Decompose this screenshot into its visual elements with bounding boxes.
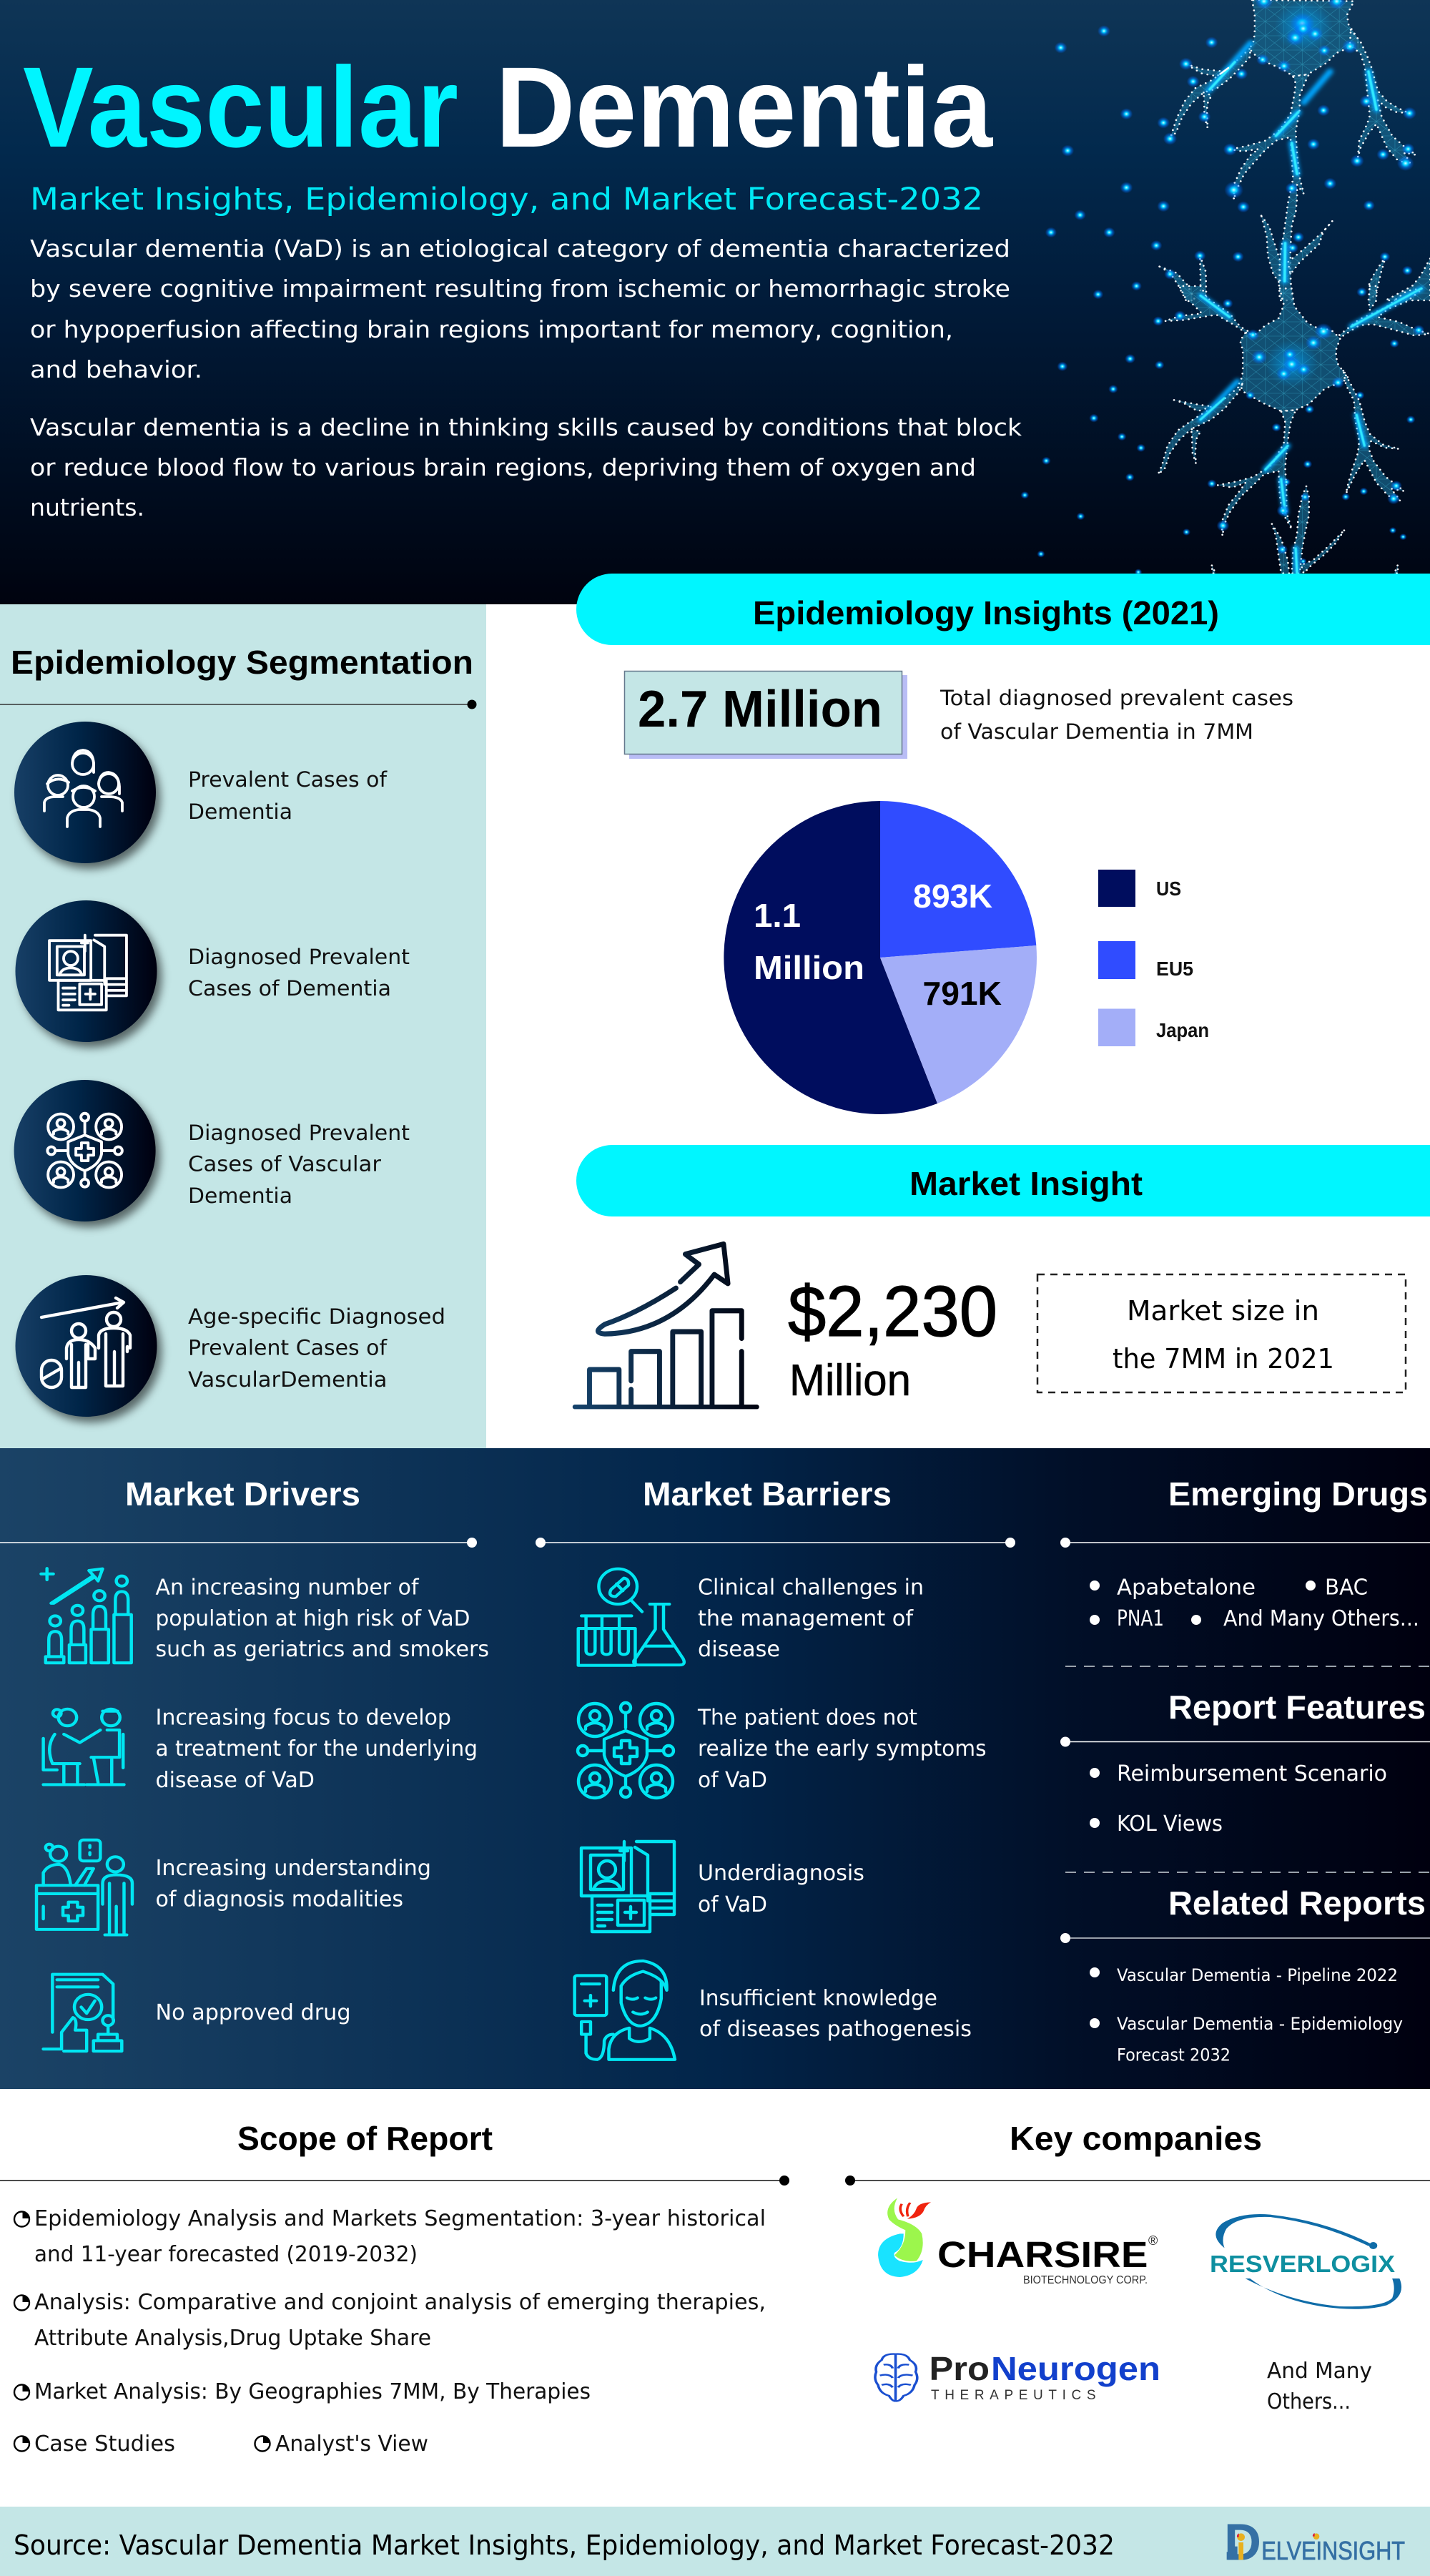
pie labels: 791K [922,975,1002,1012]
scope bullet icons [14,2211,270,2452]
market value [788,1272,997,1405]
icon: population growth [41,1568,132,1663]
source text: Source: Vascular Dementia Market Insights, Epidemiology, and Market Forecast-2032 [14,2530,1115,2561]
pie legend: EU5 [1156,958,1193,980]
intro paragraph 2: or reduce blood flow to various brain regions, depriving them of oxygen and [30,453,976,481]
text: barrier 4: of diseases pathogenesis [699,2017,972,2042]
emerging drugs: Emerging Drugs [1168,1475,1428,1513]
text: diagnosed vascular dementia: Cases of Vascular [188,1151,381,1176]
report features: Reimbursement Scenario [1117,1761,1387,1786]
emerging drugs: Apabetalone [1117,1575,1256,1601]
text: and many others: Others... [1267,2389,1351,2414]
logo: Charsire: BIOTECHNOLOGY CORP. [1023,2274,1148,2286]
title: Vascular [23,43,458,171]
logo: Resverlogix: RESVERLOGIX [1210,2251,1395,2277]
logo: DelveInsight: ELVEINSIGHT [1261,2536,1405,2565]
footer background [0,2507,1430,2576]
related reports: Vascular Dementia - Pipeline 2022 [1117,1965,1398,1985]
slice: EU5 [880,801,1036,958]
text: barrier 1: disease [698,1637,780,1662]
text: barrier 4: Insufficient knowledge [699,1986,937,2011]
intro paragraph 1: and behavior. [30,355,202,383]
column: market drivers [0,1475,489,2051]
column: market barriers [536,1475,1015,2060]
pill heading: epidemiology insights [576,574,1430,645]
text: age-specific: Age-specific Diagnosed [188,1304,445,1329]
text: prevalent cases: Prevalent Cases of [188,767,388,792]
text: diagnosed vascular dementia [188,1121,410,1208]
icon: consultation [44,1709,124,1784]
icon: rising bar chart [575,1244,757,1407]
intro paragraph 2: Vascular dementia is a decline in thinking skills caused by conditions that block [30,413,1022,441]
text: driver 2: disease of VaD [156,1768,315,1793]
item: diagnosed dementia [16,900,410,1048]
text: barrier 1: the management of [698,1606,914,1631]
icon: medical document [49,935,127,1010]
icon: group of people [44,750,122,827]
title [23,43,993,171]
barrier 3 [581,1842,864,1932]
intro paragraph 2 [30,413,1022,521]
text: diagnosed dementia [188,945,410,1001]
icon: diagnosis desk [36,1840,132,1935]
logo: Charsire: ® [1148,2233,1158,2248]
intro paragraph 1: or hypoperfusion affecting brain regions important for memory, cognition, [30,315,953,343]
text: driver 3 [156,1856,431,1912]
pie labels: 893K [913,877,992,915]
band background [0,1448,1430,2089]
text: driver 1 [156,1575,489,1662]
text: driver 3: of diagnosis modalities [156,1887,403,1912]
pie legend: US [1156,877,1181,900]
related reports [1060,1884,1430,2065]
header panel [0,0,1430,604]
upper neuron [1045,0,1430,300]
driver 3 [36,1840,431,1935]
text: driver 1: such as geriatrics and smokers [156,1637,489,1662]
emerging drugs: PNA1 [1117,1606,1164,1631]
text: barrier 3 [698,1861,864,1917]
logo: Charsire: CHARSIRE [937,2234,1148,2275]
icon: shield network [578,1703,674,1798]
text: driver 2: Increasing focus to develop [156,1705,451,1730]
driver 2 [44,1705,478,1793]
text: prevalent cases: Dementia [188,800,292,824]
scope list text [34,2206,766,2457]
emerging drugs [1060,1475,1430,1631]
dashed callout: market size: Market size in [1127,1295,1319,1327]
text: driver 4: No approved drug [156,2000,350,2025]
text: diagnosed dementia: Diagnosed Prevalent [188,945,410,969]
related reports: Related Reports [1168,1884,1426,1922]
text: diagnosed vascular dementia: Diagnosed Prevalent [188,1121,410,1145]
pie legend: Japan [1156,1019,1209,1041]
text: driver 2: a treatment for the underlying [156,1736,478,1761]
report features: Report Features [1168,1688,1426,1726]
icon: approval document [44,1975,122,2051]
column: emerging drugs, report features, related reports [1060,1475,1430,2065]
lower neuron [1020,286,1429,576]
source footer [0,2507,1430,2576]
heading: market drivers: Market Drivers [125,1475,360,1513]
heading: market barriers: Market Barriers [643,1475,892,1513]
icon: shield network [47,1114,122,1187]
text: barrier 2: The patient does not [697,1705,917,1730]
text: barrier 3: Underdiagnosis [698,1861,864,1886]
logo: ProNeurogen: THERAPEUTICS [931,2388,1095,2403]
driver 1 [41,1568,489,1663]
related reports: Vascular Dementia - Epidemiology [1117,2014,1403,2034]
logo: ProNeurogen [875,2350,1160,2403]
dashed callout: market size [1037,1274,1406,1392]
market value: $2,230 [788,1272,997,1352]
icon: patient with IV drip [575,1961,675,2060]
white background of middle section [486,604,1430,1448]
panel: scope of report [0,2120,789,2457]
heading: scope of report: Scope of Report [237,2120,493,2157]
text: barrier 1 [698,1575,924,1662]
pie labels: 1.1 [754,897,801,934]
report features [1060,1688,1430,1837]
stat box: 2.7 million [625,671,907,759]
intro paragraph 1: Vascular dementia (VaD) is an etiological category of dementia characterized [30,235,1010,262]
logo: ProNeurogen: Pro [930,2350,990,2387]
panel: market insight [575,1145,1430,1407]
text: driver 1: An increasing number of [156,1575,420,1601]
market value: Million [789,1356,911,1405]
panel background [0,604,486,1448]
item: prevalent cases [14,722,388,869]
text: barrier 2: of VaD [698,1768,767,1793]
text: barrier 3: of VaD [698,1892,767,1917]
logo: Charsire [878,2198,1158,2286]
pie labels: Million [754,949,864,986]
intro paragraph 1: by severe cognitive impairment resulting from ischemic or hemorrhagic stroke [30,275,1010,303]
intro paragraph 1 [30,235,1010,383]
related reports: Forecast 2032 [1117,2045,1231,2065]
emerging drugs: And Many Others... [1223,1606,1419,1631]
pill heading: market insight [576,1145,1430,1216]
logo: DelveInsight [1224,2514,1405,2572]
text: barrier 2 [697,1705,987,1793]
text: diagnosed vascular dementia: Dementia [188,1184,292,1208]
logo: Resverlogix [1210,2214,1401,2309]
panel: epidemiology insights [576,574,1430,1114]
barrier 1 [578,1569,924,1666]
text: barrier 4 [699,1986,972,2042]
title: Dementia [495,43,993,171]
text: and many others: And Many [1267,2359,1372,2384]
stat caption: of Vascular Dementia in 7MM [940,719,1253,744]
barrier 4 [575,1961,972,2060]
panel: key companies [845,2120,1430,2414]
scope list text: Epidemiology Analysis and Markets Segmentation: 3-year historical [34,2206,766,2231]
stat box: 2.7 million: 2.7 Million [638,681,882,738]
pill heading: market insight: Market Insight [909,1165,1143,1202]
text: barrier 1: Clinical challenges in [698,1575,924,1601]
item: diagnosed vascular dementia [14,1080,410,1227]
icon: lab flask and tubes [578,1569,684,1666]
slice: US [724,801,937,1114]
emerging drugs: BAC [1325,1575,1368,1601]
pill heading: epidemiology insights: Epidemiology Insights (2021) [753,594,1219,631]
intro paragraph 2: nutrients. [30,493,144,521]
text: age-specific: Prevalent Cases of [188,1336,388,1360]
pie labels [754,877,1002,1012]
scope list text: and 11-year forecasted (2019-2032) [34,2242,418,2267]
text: diagnosed dementia: Cases of Dementia [188,976,391,1001]
scope list text: Attribute Analysis,Drug Uptake Share [34,2326,431,2351]
text: and many others [1267,2359,1372,2414]
driver 4 [44,1975,350,2051]
pie legend [1098,870,1209,1046]
segmentation heading: Epidemiology Segmentation [11,644,473,681]
dark band [0,1448,1430,2089]
text: driver 1: population at high risk of VaD [156,1606,470,1631]
panel: epidemiology segmentation [0,604,486,1448]
scope list text: Case Studies [34,2432,175,2457]
heading: key companies: Key companies [1010,2120,1262,2157]
text: age-specific: VascularDementia [188,1367,388,1392]
slice: Japan [880,945,1037,1103]
header background [0,0,1430,604]
text: prevalent cases [188,767,388,824]
pie chart [724,801,1037,1114]
stat caption [940,686,1293,744]
scope list text: Market Analysis: By Geographies 7MM, By Therapies [34,2379,591,2404]
subtitle: Market Insights, Epidemiology, and Market Forecast-2032 [30,182,983,217]
text: barrier 2: realize the early symptoms [698,1736,987,1761]
icon: medical document [581,1842,674,1932]
neuron illustration [1020,0,1430,576]
scope list text: Analyst's View [275,2432,428,2457]
report features: KOL Views [1117,1811,1223,1837]
text: driver 2 [156,1705,478,1793]
logo: ProNeurogen: Neurogen [991,2350,1160,2387]
barrier 2 [578,1703,987,1798]
logo: DelveInsight: D [1224,2514,1261,2572]
text: driver 3: Increasing understanding [156,1856,431,1881]
dashed callout: market size: the 7MM in 2021 [1113,1343,1334,1375]
icon: age growth figures [41,1298,130,1387]
scope list text: Analysis: Comparative and conjoint analysis of emerging therapies, [34,2290,766,2315]
item: age-specific [16,1275,445,1422]
text: age-specific [188,1304,445,1392]
stat caption: Total diagnosed prevalent cases [940,686,1293,710]
